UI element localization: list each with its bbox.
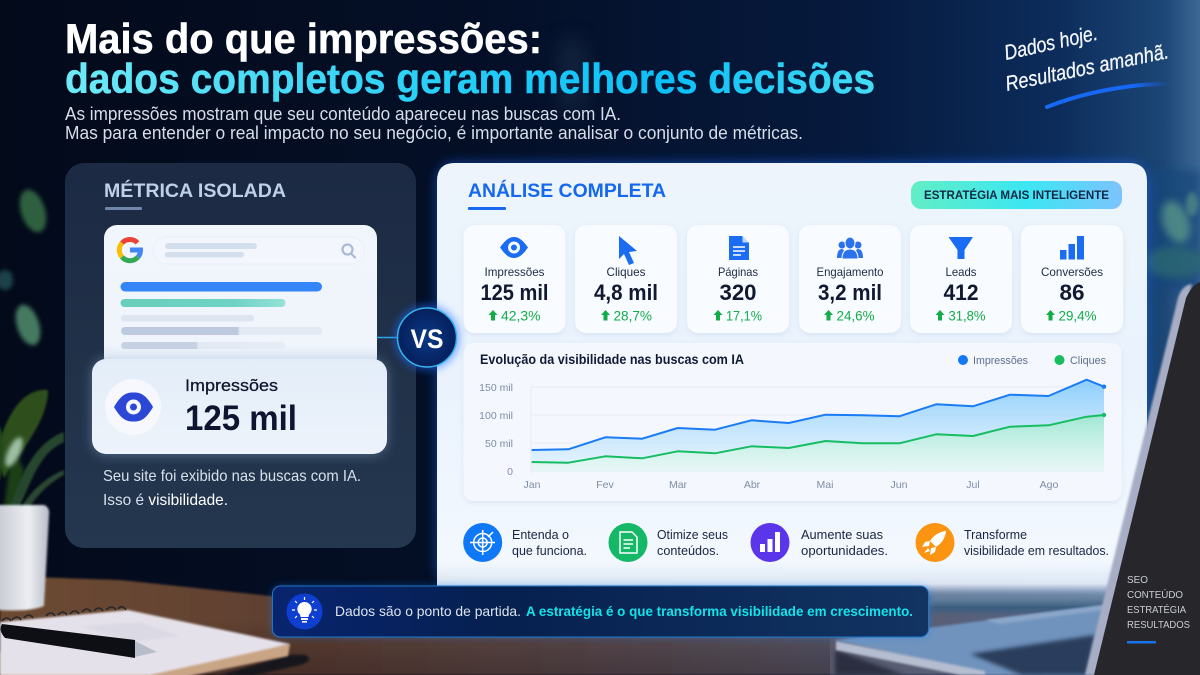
search results card [104,225,377,370]
icon: eye [500,237,528,258]
icon: up arrow [601,310,610,320]
icon: search [342,244,355,258]
side tags: ESTRATÉGIA [1127,603,1186,616]
decor: notebook and pen [0,607,309,675]
badge: estratégia mais inteligente [911,181,1122,209]
callout banner: Dados são o ponto de partida. [335,603,521,619]
metric: engajamento: 3,2 mil [818,280,882,305]
benefit: otimize [608,523,728,562]
benefit: aumente: Aumente suas [801,528,883,542]
metric: leads [910,225,1012,333]
metric: impressões: Impressões [484,265,544,279]
x axis labels: Jul [966,479,980,491]
x axis labels [524,479,1058,491]
icon: google logo [119,239,141,261]
callout banner: A estratégia é o que transforma visibilidade em crescimento. [526,603,913,619]
panel: métrica isolada [65,163,416,548]
text: description: Seu site foi exibido nas buscas com IA. [103,468,361,485]
metric: páginas: 320 [720,280,756,305]
metric: páginas: Páginas [718,265,758,279]
side tags: CONTEÚDO [1127,588,1183,601]
legend: Cliques [1070,355,1106,367]
metric: páginas: 17,1% [726,308,762,324]
x axis labels: Abr [744,479,761,491]
icon: rocket [922,531,946,555]
icon: light bulb [286,594,322,630]
x axis labels: Fev [596,479,614,491]
metric: engajamento [799,225,901,333]
metric: engajamento: 24,6% [836,308,874,324]
icon: bars [760,532,780,552]
decor: plant with pot [0,186,64,611]
benefit: otimize: Otimize seus [657,528,728,542]
x axis labels: Ago [1040,479,1058,491]
icon: up arrow [936,310,944,320]
metric: impressões: 125 mil [480,280,548,305]
x axis labels: Mar [669,479,688,491]
chart: evolução da visibilidade [464,343,1122,501]
x axis labels: Mai [817,479,833,491]
icon: target [470,530,495,555]
line: impressões [532,380,1104,450]
icon: up arrow [488,310,498,320]
heading: métrica isolada: MÉTRICA ISOLADA [104,180,286,202]
panel: análise completa [437,163,1147,606]
chart title: Evolução da visibilidade nas buscas com IA [480,352,744,367]
metric: conversões: Conversões [1041,265,1103,279]
metric: leads: 31,8% [948,308,986,324]
icon: up arrow [1046,310,1055,320]
side tags: SEO [1127,574,1148,586]
metric: cliques: Cliques [606,265,646,279]
y axis labels: 0 [507,466,513,478]
icon: eye [105,379,161,435]
metric: impressões: 42,3% [501,308,540,324]
callout banner [272,586,928,637]
metric: impressões [464,225,566,333]
handwritten note: Dados hoje. [1002,22,1100,65]
metric: conversões: 86 [1060,280,1084,305]
text: description [103,468,361,509]
text: description: Isso é visibilidade. [103,492,228,509]
benefit: aumente: oportunidades. [801,544,888,558]
heading: análise completa: ANÁLISE COMPLETA [468,180,666,202]
subtitle [65,104,803,143]
benefit: entenda [463,523,587,562]
vs badge [377,304,460,370]
decor: desk [0,576,1200,675]
line: cliques [532,415,1104,463]
subtitle: As impressões mostram que seu conteúdo apareceu nas buscas com IA. [65,104,621,124]
icon: up arrow [824,310,833,320]
metric: cliques: 4,8 mil [594,280,658,305]
y axis labels: 100 mil [479,410,513,422]
y axis labels [479,382,513,478]
badge: estratégia mais inteligente: ESTRATÉGIA MAIS INTELIGENTE [924,189,1109,202]
metric: leads: Leads [946,265,976,279]
area: cliques [532,415,1104,471]
icon: up arrow [714,310,722,320]
benefit: otimize: conteúdos. [657,544,719,558]
icon: funnel [948,237,973,259]
icon: people [837,237,863,259]
area: impressões [532,380,1104,463]
metric: cliques: 28,7% [614,308,652,324]
decor: laptop [835,605,1110,675]
icon: bars [1060,236,1084,260]
card: impressões: 125 mil [185,399,297,438]
card: impressões [92,359,387,454]
side tags [1127,574,1190,631]
icon: cursor [619,236,637,265]
card: impressões: Impressões [185,376,278,395]
vs badge: VS [410,324,444,354]
metric: páginas [687,225,789,333]
icon: document [620,532,637,553]
y axis labels: 50 mil [485,438,513,450]
legend [958,355,1106,367]
benefit: transforme: visibilidade em resultados. [964,544,1109,558]
legend: Impressões [973,355,1028,367]
metric: conversões [1021,225,1123,333]
x axis labels: Jan [524,479,541,491]
title: Mais do que impressões: [65,15,542,62]
x axis labels: Jun [891,479,908,491]
benefit: entenda: que funciona. [512,544,587,558]
subtitle: Mas para entender o real impacto no seu negócio, é importante analisar o conjunto de métricas. [65,123,803,143]
benefit: entenda: Entenda o [512,528,569,542]
handwritten note: Resultados amanhã. [1003,40,1171,96]
icon: document [729,236,749,260]
metric: cliques [575,225,677,333]
benefit: transforme [916,523,1109,562]
handwritten note [1002,22,1171,107]
title [65,15,875,102]
title: dados completos geram melhores decisões [65,55,875,102]
metric: leads: 412 [944,280,978,305]
laptop screen [1085,282,1200,675]
benefit: transforme: Transforme [964,528,1027,542]
y axis labels: 150 mil [479,382,513,394]
benefit: aumente [750,523,888,562]
side tags: RESULTADOS [1127,619,1190,631]
metric: engajamento: Engajamento [816,265,884,279]
metric: conversões: 29,4% [1058,308,1096,324]
